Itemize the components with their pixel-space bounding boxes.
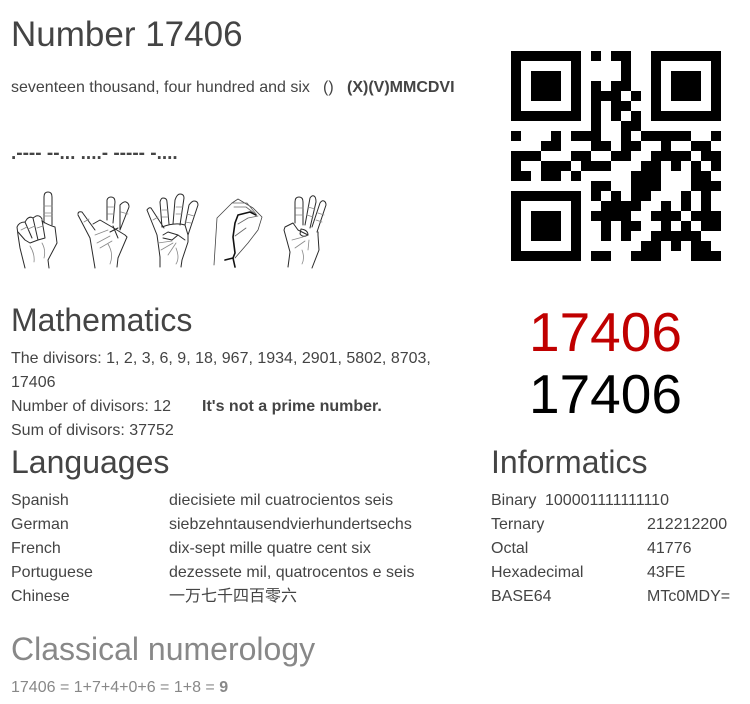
number in words and roman numeral: seventeen thousand, four hundred and six <box>11 79 310 96</box>
languages table: French <box>11 540 61 557</box>
informatics table: Binary <box>491 492 536 509</box>
informatics table: 100001111111110 <box>545 492 669 509</box>
languages table <box>11 492 414 605</box>
icon: sign language hands <box>16 192 326 268</box>
languages table: dezessete mil, quatrocentos e seis <box>169 564 414 581</box>
languages table: diecisiete mil cuatrocientos seis <box>169 492 393 509</box>
informatics table: Hexadecimal <box>491 564 583 581</box>
divisors text <box>11 350 431 439</box>
languages table: Portuguese <box>11 564 93 581</box>
icon: hand sign 2 <box>78 197 129 268</box>
informatics table: MTc0MDY= <box>647 588 730 605</box>
data modules <box>511 51 721 261</box>
icon: hand sign 4 <box>214 199 262 267</box>
divisors text: The divisors: 1, 2, 3, 6, 9, 18, 967, 1934, 2901, 5802, 8703, <box>11 350 431 367</box>
heading: Mathematics: Mathematics <box>11 302 192 338</box>
numerology sum: 17406 = 1+7+4+0+6 = 1+8 = 9 <box>11 679 228 696</box>
big number black: 17406 <box>529 363 682 425</box>
heading: Classical numerology: Classical numerology <box>11 631 315 667</box>
informatics table: 212212200 <box>647 516 727 533</box>
informatics table: 41776 <box>647 540 692 557</box>
finder patterns <box>511 51 721 261</box>
informatics table: Ternary <box>491 516 544 533</box>
languages table: siebzehntausendvierhundertsechs <box>169 516 412 533</box>
big number red: 17406 <box>529 301 682 363</box>
languages table: dix-sept mille quatre cent six <box>169 540 371 557</box>
heading: Languages: Languages <box>11 444 169 480</box>
number in words and roman numeral: (X)(V)MMCDVI <box>347 79 455 96</box>
languages table: German <box>11 516 69 533</box>
divisors text: Sum of divisors: 37752 <box>11 422 174 439</box>
divisors text: Number of divisors: 12 <box>11 398 171 415</box>
languages table: Chinese <box>11 588 70 605</box>
number in words and roman numeral: () <box>323 79 334 96</box>
icon: hand sign 1 <box>17 192 57 268</box>
title: Number 17406 <box>11 15 243 54</box>
icon: hand sign 3 <box>147 194 198 267</box>
number in words and roman numeral <box>11 79 455 96</box>
morse code: .---- --... ....- ----- -.... <box>11 143 178 164</box>
divisors text: 17406 <box>11 374 56 391</box>
informatics table: 43FE <box>647 564 685 581</box>
informatics table: BASE64 <box>491 588 551 605</box>
languages table: 一万七千四百零六 <box>169 588 297 605</box>
languages table: Spanish <box>11 492 69 509</box>
informatics table: Octal <box>491 540 528 557</box>
informatics table <box>491 492 730 605</box>
heading: Informatics: Informatics <box>491 444 647 480</box>
icon: hand sign 5 <box>284 196 326 268</box>
divisors text: It's not a prime number. <box>202 398 382 415</box>
QR code <box>511 51 721 261</box>
